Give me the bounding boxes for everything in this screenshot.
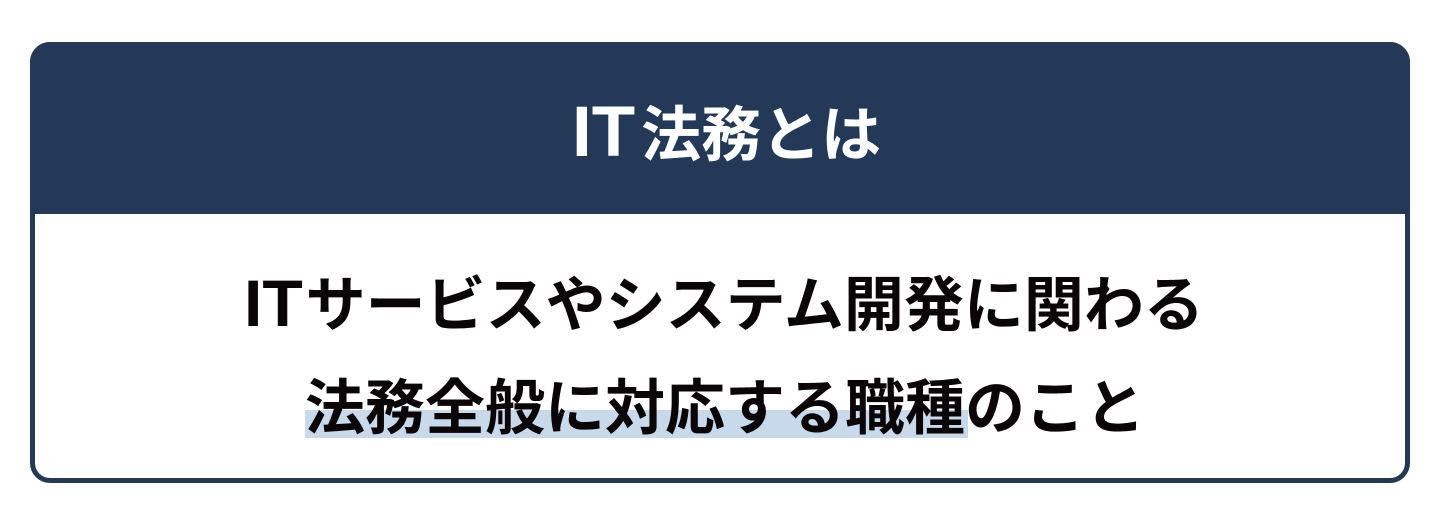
text line 2: 法務全般に対応する職種のこと [305,375,1145,442]
header band [30,42,1410,214]
highlight under text [305,410,968,438]
title: IT法務とは: IT法務とは [572,93,881,172]
text line 1: ITサービスやシステム開発に関わる [244,266,1204,340]
